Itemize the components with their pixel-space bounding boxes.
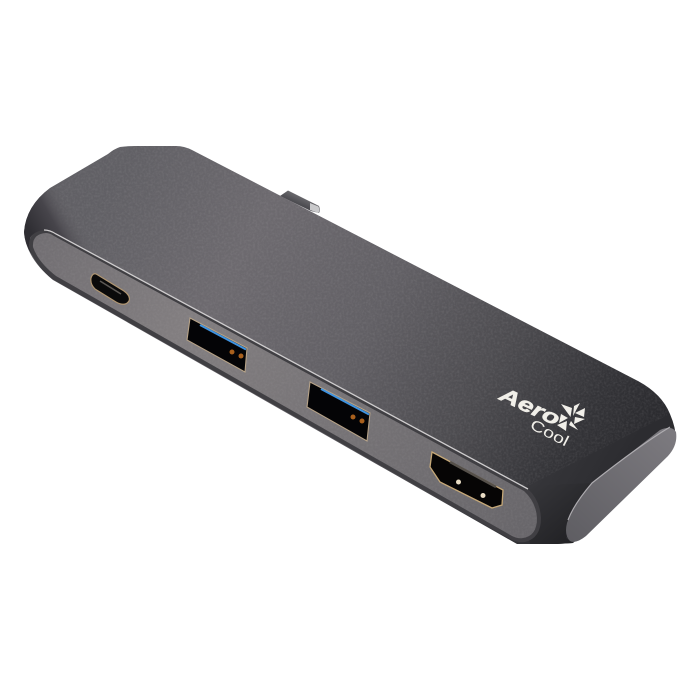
- end cap highlight: [568, 427, 670, 520]
- logo: AeroCool: [495, 383, 585, 450]
- front plate highlight: [44, 230, 528, 489]
- left rounded corner: [24, 175, 92, 256]
- logo wordmark Cool: Cool: [527, 416, 571, 450]
- logo star mark: [557, 403, 585, 431]
- end cap: [566, 428, 676, 542]
- USB-C connector plug: [280, 190, 320, 213]
- port: USB-A left: [187, 318, 247, 372]
- port: USB-C: [91, 274, 129, 304]
- hub body: [24, 146, 676, 544]
- logo wordmark Aero: Aero: [495, 383, 563, 431]
- front plate rim: [29, 230, 541, 542]
- port: HDMI: [430, 452, 503, 508]
- front plate: [33, 233, 537, 538]
- front plate texture: [33, 233, 537, 538]
- port: USB-A right: [307, 382, 370, 441]
- top surface: [24, 146, 676, 544]
- right dark corner: [522, 483, 592, 544]
- surface texture: [40, 146, 670, 490]
